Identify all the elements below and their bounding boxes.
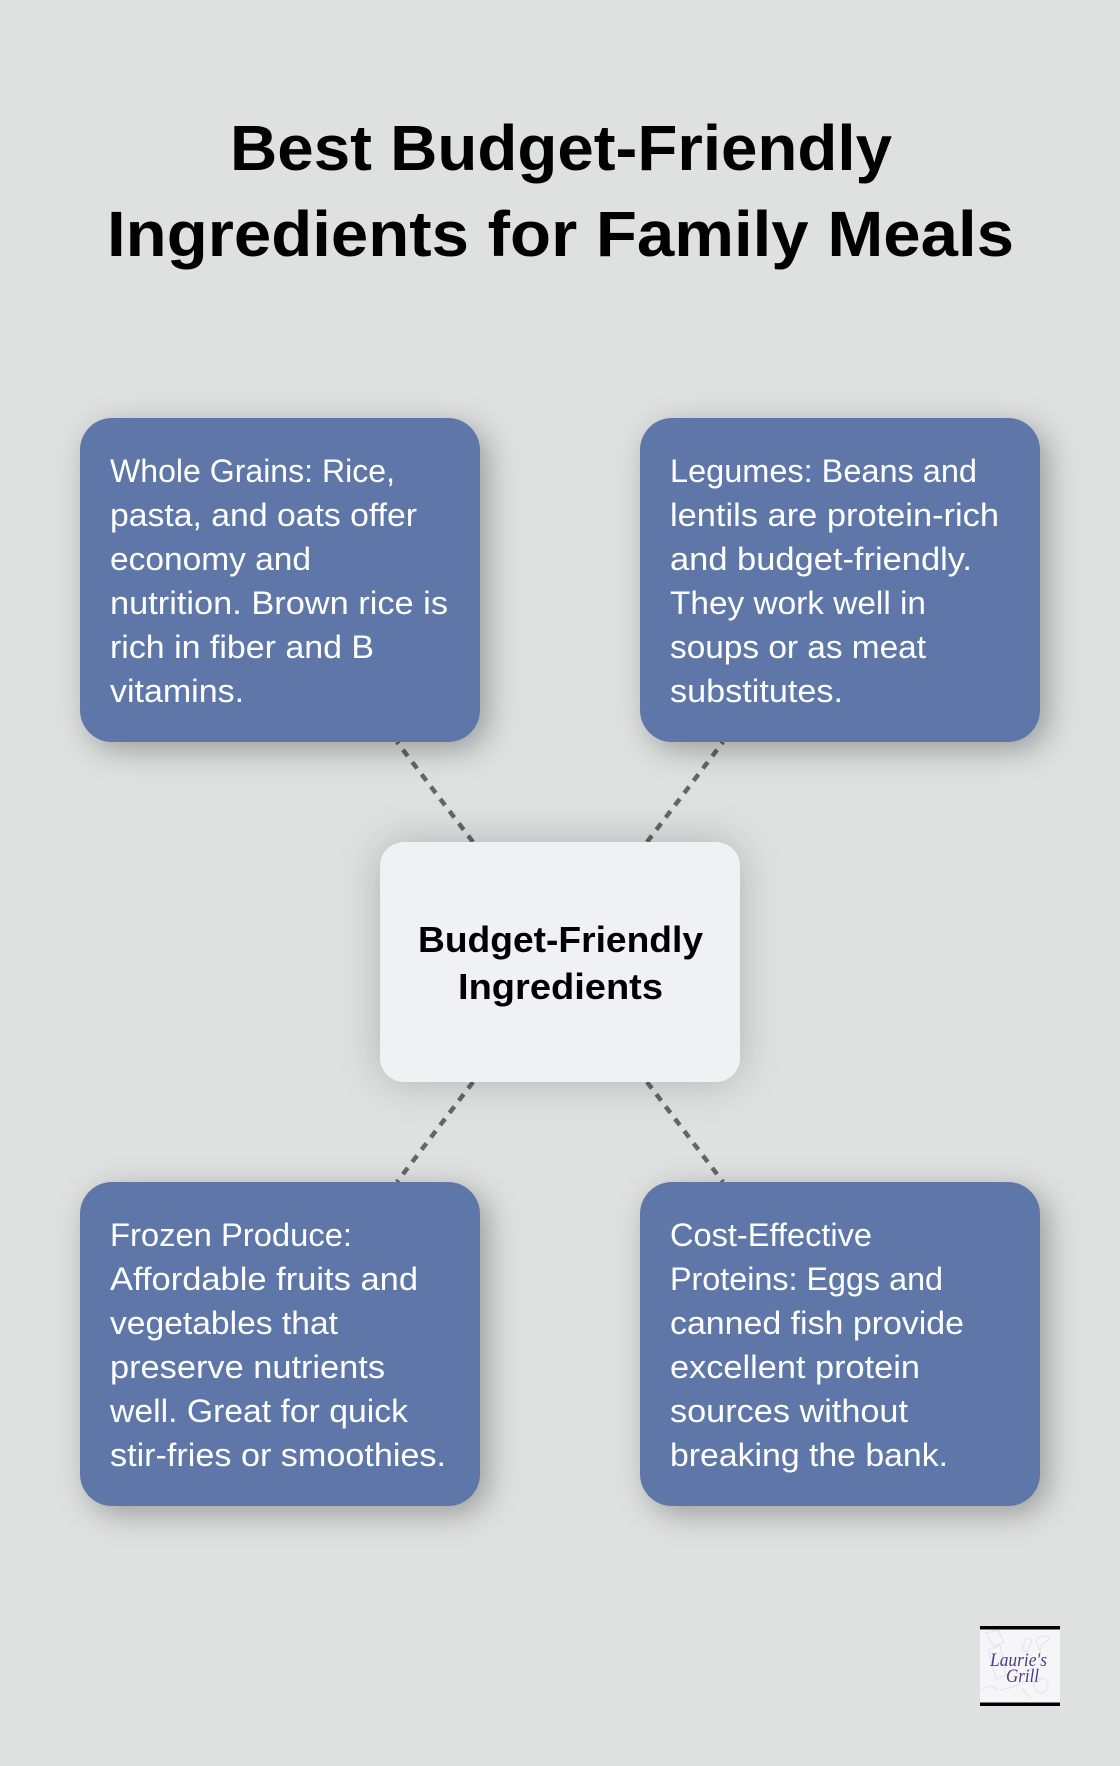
panel: whole grains — [80, 418, 480, 742]
connector: center to legumes — [647, 742, 723, 842]
panel: frozen produce: well. Great for quick — [109, 1393, 409, 1429]
panel: frozen produce: vegetables that — [110, 1305, 338, 1341]
connector: center to proteins — [647, 1082, 723, 1182]
panel: legumes: lentils are protein-rich — [670, 497, 999, 533]
panel: frozen produce: Affordable fruits and — [110, 1261, 418, 1297]
icon: Laurie's Grill logo — [980, 1626, 1060, 1706]
panel: legumes: soups or as meat — [670, 629, 926, 665]
panel: cost-effective proteins: Cost-Effective — [670, 1217, 872, 1253]
panel: frozen produce: preserve nutrients — [110, 1349, 385, 1385]
panel: whole grains: nutrition. Brown rice is — [110, 585, 448, 621]
connector: center to frozen produce — [397, 1082, 473, 1182]
connector: center to whole grains — [397, 742, 473, 842]
panel: cost-effective proteins: excellent protein — [670, 1349, 920, 1385]
title — [107, 112, 1014, 270]
panel: whole grains: economy and — [110, 541, 311, 577]
panel: legumes: Legumes: Beans and — [670, 453, 977, 489]
panel: legumes: They work well in — [670, 585, 926, 621]
title: Ingredients for Family Meals — [107, 198, 1014, 270]
panel: legumes: substitutes. — [670, 673, 843, 709]
panel: legumes — [640, 418, 1040, 742]
panel: frozen produce — [80, 1182, 480, 1506]
panel: whole grains: vitamins. — [110, 673, 244, 709]
title: Best Budget-Friendly — [230, 112, 892, 184]
panel: center node: Ingredients — [458, 966, 663, 1007]
panel: frozen produce: stir-fries or smoothies. — [110, 1437, 446, 1473]
panel: cost-effective proteins: canned fish provide — [670, 1305, 964, 1341]
panel: whole grains: rich in fiber and B — [110, 629, 374, 665]
icon: Laurie's Grill logo: Grill — [1006, 1666, 1039, 1687]
panel: cost-effective proteins: breaking the bank. — [670, 1437, 948, 1473]
panel: cost-effective proteins — [640, 1182, 1040, 1506]
panel: frozen produce: Frozen Produce: — [110, 1217, 352, 1253]
panel: legumes: and budget-friendly. — [670, 541, 972, 577]
panel: cost-effective proteins: sources without — [670, 1393, 908, 1429]
panel: center node — [380, 842, 740, 1082]
panel: whole grains: Whole Grains: Rice, — [110, 453, 395, 489]
panel: cost-effective proteins: Proteins: Eggs and — [670, 1261, 943, 1297]
panel: whole grains: pasta, and oats offer — [110, 497, 417, 533]
icon: Laurie's Grill logo: Laurie's — [989, 1650, 1047, 1671]
panel: center node: Budget-Friendly — [418, 919, 703, 960]
